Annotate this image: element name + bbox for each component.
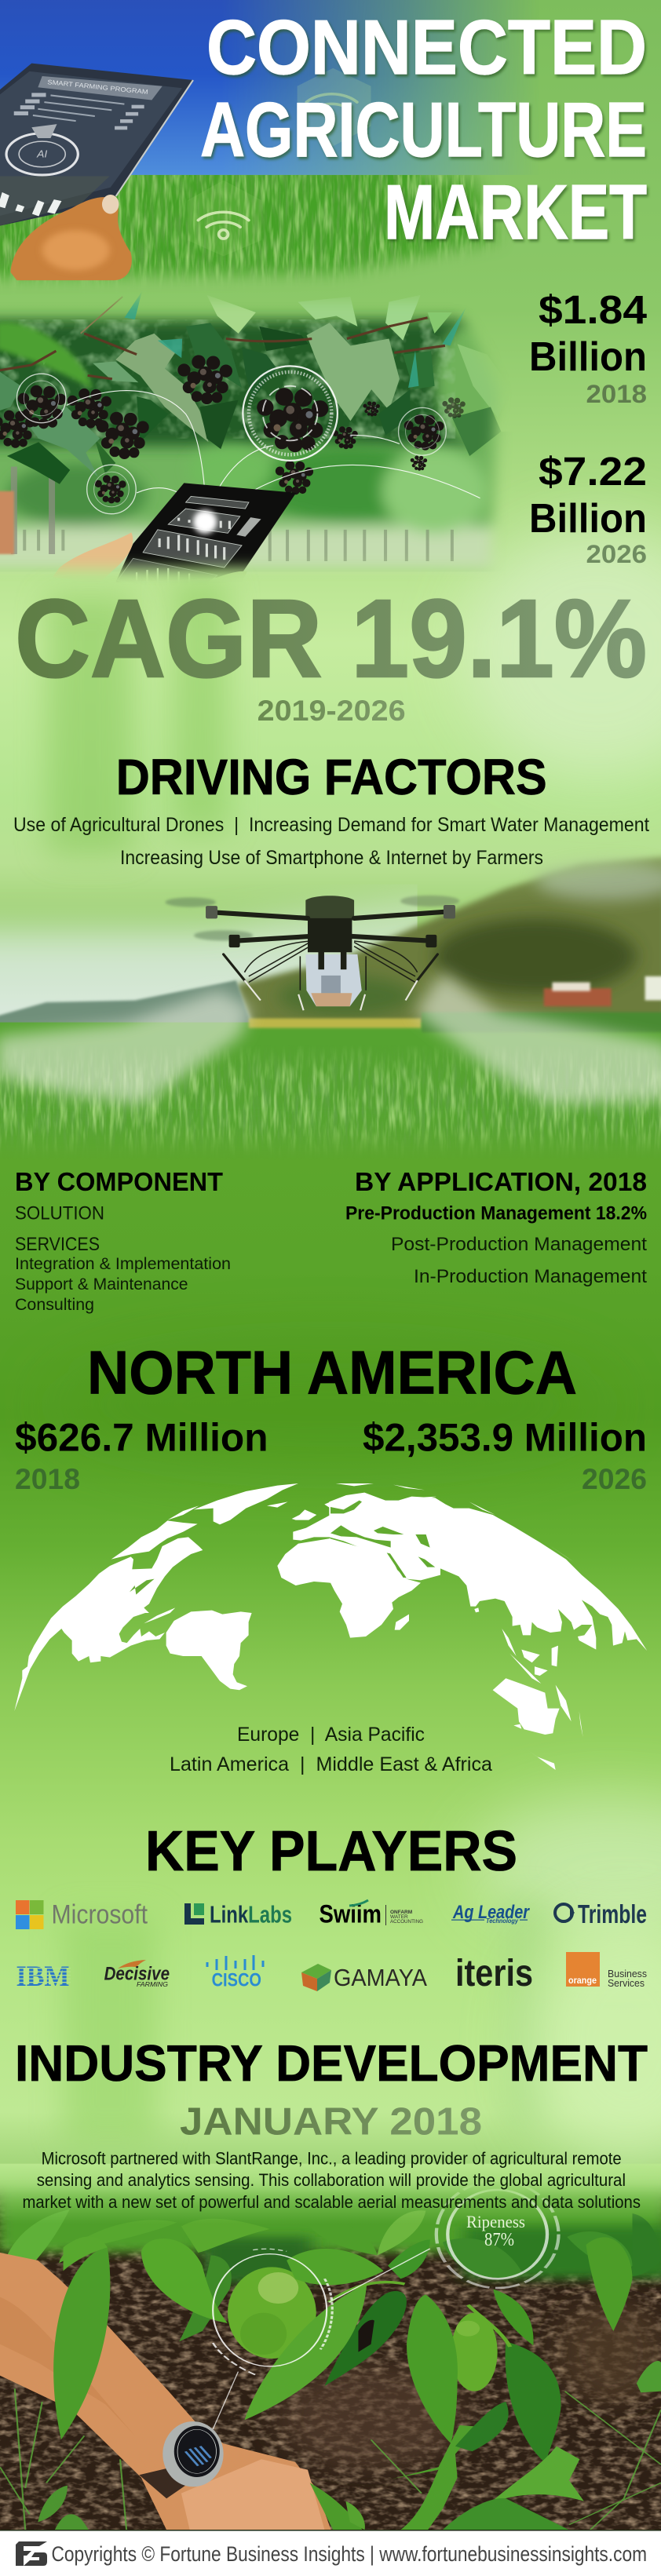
logo: orange business services [566, 1952, 647, 1989]
logo: decisive farming [104, 1960, 170, 1988]
heading: driving factors: DRIVING FACTORS [116, 749, 547, 805]
footer [0, 2530, 661, 2576]
panel: by application: Post-Production Management [391, 1234, 647, 1255]
logo: swiim: ACCOUNTING [390, 1919, 423, 1925]
logo: swiim [319, 1899, 423, 1928]
panel: north america: 2018 [15, 1463, 80, 1495]
heading: driving factors: Increasing Use of Smartphone & Internet by Farmers [120, 847, 543, 869]
logo: ibm: IBM [16, 1961, 69, 1993]
photo: vineyard with smart overlays [0, 293, 502, 580]
CAGR headline: 2019-2026 [257, 695, 406, 727]
market size stats: Billion [529, 334, 647, 380]
lower tablet [117, 483, 296, 579]
development text: Microsoft partnered with SlantRange, Inc., a leading provider of agricultural remote [42, 2149, 622, 2169]
development text: sensing and analytics sensing. This collaboration will provide the global agricultural [37, 2170, 626, 2190]
logo: orange business services: orange [568, 1975, 597, 1986]
grass blades [0, 2388, 661, 2530]
branches [0, 297, 445, 379]
overlay circles and links [16, 366, 480, 523]
logo: microsoft [16, 1900, 148, 1930]
top haze [0, 2164, 661, 2224]
key player logos [16, 1899, 647, 1994]
logo: linklabs [184, 1901, 292, 1928]
heading: key players: KEY PLAYERS [145, 1820, 517, 1883]
panel: north america: $626.7 Million [15, 1416, 268, 1460]
icon: wifi hexagons [188, 68, 371, 257]
ripeness readout [466, 2212, 525, 2250]
logo: swiim: ONFARM [390, 1910, 412, 1915]
panel: north america: 2026 [582, 1463, 647, 1495]
logo: ag leader: Technology [486, 1917, 519, 1925]
world map [14, 1483, 647, 1770]
market size stats: Billion [529, 496, 647, 542]
icon: fortune business insights logo [16, 2541, 47, 2566]
drone [166, 896, 459, 1010]
market size stats: 2026 [586, 540, 647, 568]
logo: iteris: iteris [455, 1953, 533, 1994]
panel: by component: SERVICES [15, 1234, 100, 1255]
logo: orange business services: Business [608, 1968, 647, 1979]
title [200, 4, 647, 255]
logo: gamaya: GAMAYA [334, 1964, 427, 1991]
logo: decisive farming: Decisive [104, 1964, 170, 1985]
photo: pepper plant with smartwatch [0, 2164, 661, 2545]
panel: by application [345, 1167, 647, 1287]
tablet: AI [36, 148, 48, 159]
panel: north america [15, 1337, 647, 1495]
panel: by component: SOLUTION [15, 1203, 104, 1224]
hand holding tablet [10, 197, 132, 280]
hand under tablet [55, 532, 133, 574]
panel: by component: Support & Maintenance [15, 1275, 188, 1293]
back leaves [0, 2209, 661, 2345]
panel: by component: BY COMPONENT [15, 1167, 223, 1196]
panel: north america: $2,353.9 Million [363, 1416, 647, 1460]
forearm and hand [0, 2253, 331, 2530]
panel: by component: Consulting [15, 1296, 94, 1314]
logo: microsoft: Microsoft [52, 1900, 148, 1930]
panel: by component [15, 1167, 231, 1314]
fence and trunks [24, 530, 452, 561]
date: january 2018: JANUARY 2018 [180, 2100, 482, 2143]
photo: drone over field [0, 856, 661, 1161]
other regions: Latin America | Middle East & Africa [170, 1753, 492, 1775]
ripeness readout: 87% [484, 2230, 514, 2250]
blurred foreground leaf [0, 322, 93, 389]
logo: swiim: Swiim [319, 1899, 382, 1928]
overlay rings [213, 2180, 559, 2429]
logo: linklabs: LinkLabs [210, 1901, 292, 1928]
panel: by application: In-Production Management [414, 1266, 647, 1287]
logo: trimble [555, 1899, 647, 1928]
front leaves [141, 2238, 561, 2463]
grape clusters [0, 355, 466, 503]
other regions: Europe | Asia Pacific [237, 1724, 425, 1746]
map: africa, asia and oceania [329, 1483, 647, 1770]
panel: by component: Integration & Implementation [15, 1255, 231, 1273]
panel: north america: NORTH AMERICA [87, 1337, 577, 1407]
logo: swiim: WATER [390, 1914, 408, 1920]
watch [139, 2421, 224, 2498]
panel: by application: Pre-Production Management 18.2% [345, 1203, 647, 1224]
other regions [170, 1724, 492, 1775]
map: americas and western europe [14, 1483, 330, 1711]
market size stats [529, 287, 648, 568]
logo: orange business services: Services [608, 1977, 645, 1989]
panel: by application: BY APPLICATION, 2018 [355, 1167, 647, 1196]
heading: driving factors [13, 749, 649, 869]
peppers [228, 2267, 498, 2392]
heading: industry development: INDUSTRY DEVELOPMENT [15, 2034, 648, 2092]
development text [22, 2149, 641, 2212]
logo: decisive farming: FARMING [137, 1981, 168, 1988]
leaves over arm [38, 2237, 584, 2530]
teal tags [124, 291, 466, 388]
tablet: SMART FARMING PROGRAM [47, 78, 148, 96]
market size stats: $7.22 [539, 449, 647, 494]
market size stats: $1.84 [539, 287, 648, 332]
market size stats: 2018 [586, 380, 647, 408]
vine leaves [0, 295, 512, 484]
tablet [0, 64, 193, 226]
logo: ag leader: Ag Leader [452, 1902, 530, 1923]
photo: smart farming tablet, sky and grass [0, 0, 544, 295]
logo: cisco [207, 1955, 263, 1990]
ripeness readout: Ripeness [466, 2212, 525, 2231]
logo: cisco: CISCO [212, 1970, 261, 1990]
